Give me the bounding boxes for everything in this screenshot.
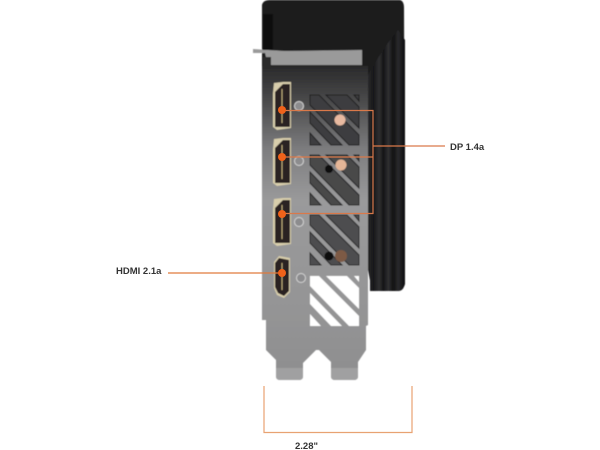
port: HDMI (274, 256, 290, 298)
left dark mount (263, 14, 273, 50)
HDMI connector line (168, 272, 282, 274)
heatsink fins (368, 30, 405, 291)
port marker dots (278, 106, 286, 277)
DP connector lines (282, 110, 445, 214)
cooler body (262, 0, 405, 291)
silver top strip (253, 49, 362, 65)
grille section 2 (310, 155, 359, 205)
mounting bracket plate (262, 66, 368, 380)
bracket lighter tabs (276, 368, 358, 380)
grille section 3 (310, 215, 359, 265)
label: HDMI 2.1a: HDMI 2.1a (116, 266, 162, 277)
port: DisplayPort 1 (273, 82, 291, 130)
copper heat pipes (324, 114, 347, 262)
port: DisplayPort 3 (273, 198, 291, 246)
label: DP 1.4a: DP 1.4a (450, 142, 485, 153)
grille section 4 (310, 276, 359, 326)
width dimension bracket (264, 386, 412, 432)
port: DisplayPort 2 (273, 138, 291, 186)
screws (294, 102, 306, 282)
grille section 1 (310, 95, 359, 145)
graphics card illustration (253, 0, 405, 380)
